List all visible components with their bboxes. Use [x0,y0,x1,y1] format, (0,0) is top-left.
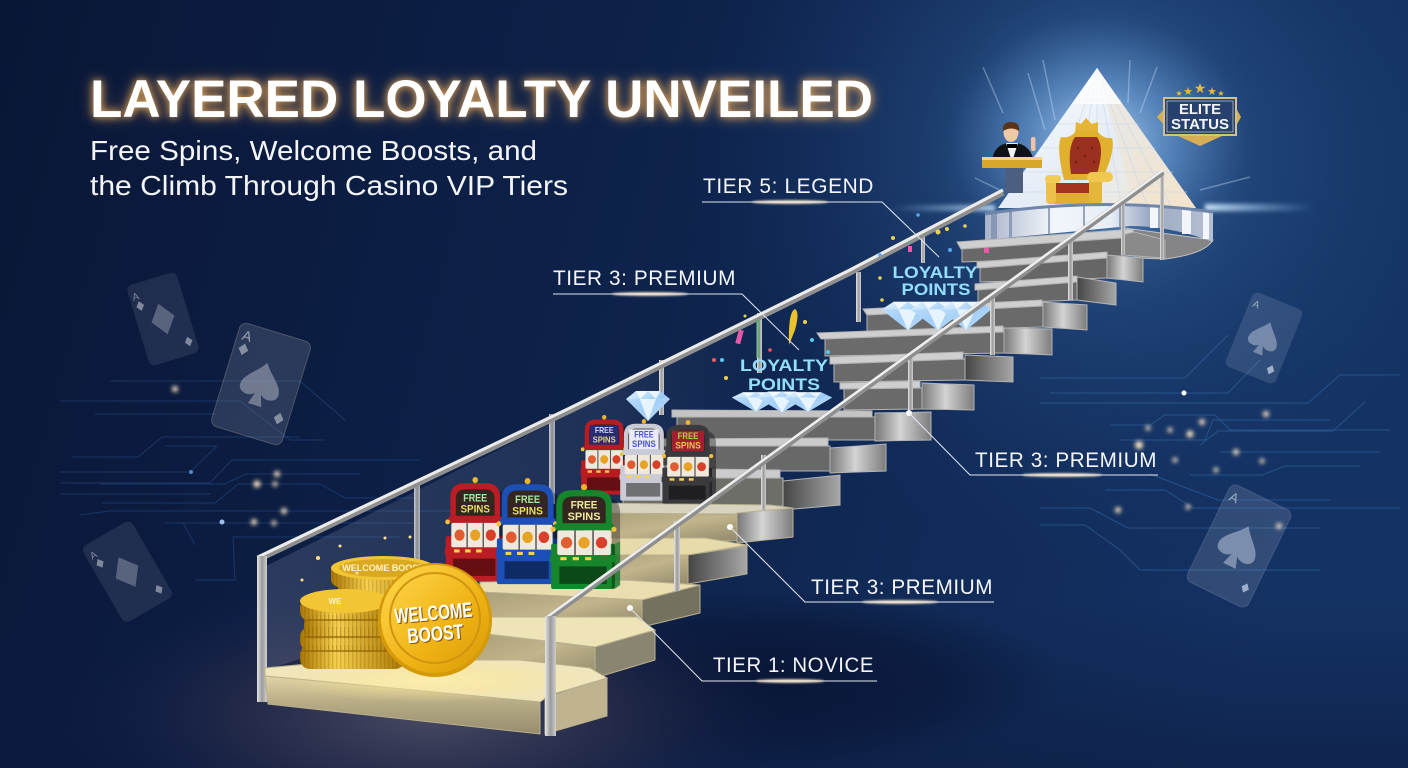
front handrail [545,170,1164,736]
welcome boost coin: BOOST [406,621,464,648]
summit platform [985,204,1213,259]
welcome boost coin: WELCOME [394,599,473,628]
callout: tier 3 premium lower [727,524,994,604]
gold coin stacks: WELCOME BOOST [342,563,424,573]
slot machine: red: SPINS [460,503,490,516]
card: ace of spades bottom right: A [1227,489,1242,506]
staircase lower cream steps [265,503,793,734]
slot machine: green: SPINS [568,511,601,523]
elite status badge: ★ [1183,86,1193,98]
gold sparkles [300,536,412,582]
card: ace of spades top right [1224,291,1304,385]
slot machine: red [580,415,629,495]
slot machine: white [619,419,670,501]
platform glow [280,658,580,702]
step 9 [830,352,1013,382]
circuit lines left [60,381,470,580]
step 8 [840,381,974,410]
welcome boost coin [378,563,492,677]
slot machine: green [550,484,620,589]
slot machine: black: FREE [678,431,698,441]
elite status badge: ★ [1217,89,1225,98]
title: LAYERED LOYALTY UNVEILED [90,70,873,129]
back row slot machines [580,415,716,504]
gold coin stacks [300,556,435,669]
subtitle [90,135,568,201]
elite status badge: ★ [1175,89,1183,98]
step 4 [585,503,793,543]
slot machine: white: SPINS [632,439,656,449]
butler at podium [982,122,1042,193]
glow dots [172,386,1282,529]
slot machine: red: SPINS [593,435,616,444]
slot machine: blue: SPINS [512,505,543,518]
diamond on machine [626,391,670,421]
step 5 [620,468,840,510]
card: ace of spades left: A [240,327,255,345]
loyalty points lower [712,309,832,412]
loyalty points upper: LOYALTY [892,263,978,282]
card: ace of spades left [210,322,312,446]
step 6 [640,438,886,473]
gold coin stacks: WE [329,597,342,606]
card: ace of diamonds bottom left [81,519,174,624]
callout: tier 5 legend: TIER 5: LEGEND [703,175,874,198]
card: ace of diamonds bottom left: A [88,549,100,562]
slot machine: red [445,477,507,581]
slot machine: blue [496,478,561,584]
step 3 [585,538,747,584]
slot machine: black [662,420,716,504]
elite status badge [1157,80,1241,146]
bottom platform [265,660,607,734]
card: ace of diamonds top left [126,271,200,367]
elite status badge: ★ [1207,86,1217,98]
loyalty points lower: LOYALTY [740,356,829,375]
elite status badge: ELITE [1179,101,1221,118]
loyalty points lower: POINTS [748,375,820,394]
throne [1045,118,1113,204]
step 14 top [957,229,1165,262]
slot machine: red: FREE [595,426,614,435]
loyalty points upper: POINTS [902,280,970,299]
callout: tier 1 novice: TIER 1: NOVICE [713,654,874,677]
circuit lines right [1040,335,1400,570]
slot machine: black: SPINS [675,441,701,451]
callout: tier 1 novice [627,605,877,683]
elite status badge: STATUS [1171,116,1229,133]
summit glow [890,15,1315,265]
card: ace of spades bottom right [1185,483,1293,609]
step 11 [863,300,1087,332]
step 7 [672,410,931,441]
callout: tier 3 premium lower: TIER 3: PREMIUM [811,576,993,599]
card: ace of diamonds top left: A [131,291,141,304]
loyalty points upper [878,213,991,330]
slot machine: green: FREE [571,500,598,512]
slot machine: blue: FREE [515,494,540,506]
step 2 [480,580,700,627]
slot machine: red: FREE [463,492,487,505]
staircase upper steel steps [620,229,1165,510]
glass pyramid [998,68,1196,208]
step 13 [977,252,1143,282]
step 1 [470,617,655,679]
elite status badge: ★ [1194,80,1206,96]
back handrail [257,190,1003,702]
callout: tier 3 premium right [906,410,1158,477]
callout: tier 5 legend [702,175,939,257]
step 12 [975,276,1116,305]
card: ace of spades top right: A [1251,299,1262,312]
front row slot machines [445,477,620,589]
slot machine: white: FREE [634,429,654,439]
callout: tier 3 premium right: TIER 3: PREMIUM [975,449,1157,472]
callout: tier 3 premium upper: TIER 3: PREMIUM [553,267,736,290]
subtitle: Free Spins, Welcome Boosts, and [90,135,537,166]
subtitle: the Climb Through Casino VIP Tiers [90,170,568,201]
step 10 [817,326,1052,356]
callout: tier 3 premium upper [553,267,799,350]
